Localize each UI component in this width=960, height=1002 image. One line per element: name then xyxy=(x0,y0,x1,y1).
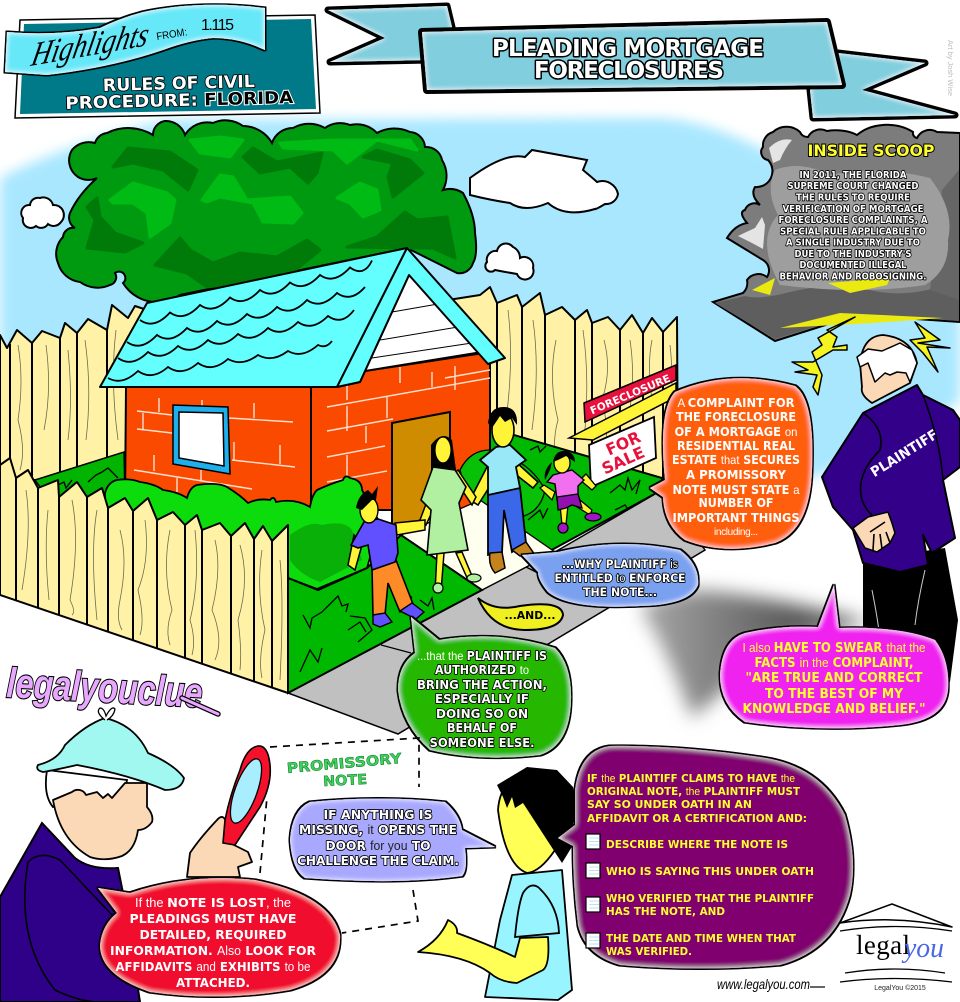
left grass behind fence xyxy=(35,452,125,515)
website url: www.legalyou.com xyxy=(717,976,810,992)
teal plate xyxy=(15,15,320,118)
boy xyxy=(348,486,425,627)
callout: purple original note bubble: WAS VERIFIED. xyxy=(606,945,692,958)
inside scoop body text: IN 2011, THE FLORIDA xyxy=(800,170,907,181)
callout: magenta swear bubble xyxy=(720,585,948,728)
callout: orange complaint bubble: A PROMISSORY xyxy=(686,468,786,482)
callout: red note lost bubble xyxy=(98,878,340,997)
callout: orange complaint bubble: NOTE MUST STATE a xyxy=(672,483,800,497)
ribbon xyxy=(5,5,265,75)
callout: orange complaint bubble: IMPORTANT THINGS xyxy=(672,511,800,525)
rules of civil procedure heading xyxy=(65,71,294,114)
sleeve xyxy=(515,885,559,937)
callout: orange complaint bubble: THE FORECLOSURE xyxy=(676,410,796,424)
callout: orange complaint bubble xyxy=(650,378,812,549)
callout: magenta swear bubble: I also HAVE TO SWEAR that the xyxy=(742,640,926,656)
callout: purple original note bubble: HAS THE NOTE, AND xyxy=(606,905,725,918)
callout: green authorized bubble: DOING SO ON xyxy=(436,707,528,721)
callout: lavender missing bubble: CHALLENGE THE CLAIM. xyxy=(297,853,459,868)
brick lines xyxy=(134,366,490,492)
callout: red note lost bubble: DETAILED, REQUIRED xyxy=(140,927,286,942)
callout: blue entitled bubble xyxy=(522,544,698,607)
plaintiff figure xyxy=(822,335,960,682)
highlights script: Highlights xyxy=(27,15,153,74)
right lawn xyxy=(460,428,662,552)
callout: green authorized bubble: SOMEONE ELSE. xyxy=(430,736,534,750)
girl xyxy=(540,451,601,533)
checklist icons xyxy=(586,834,600,948)
callout: green authorized bubble: AUTHORIZED to xyxy=(435,663,529,677)
face xyxy=(53,783,152,859)
callout: magenta swear bubble: FACTS in the COMPLAINT, xyxy=(754,655,914,671)
callout: lavender missing bubble: IF ANYTHING IS xyxy=(324,807,432,822)
rule number: 1.115 xyxy=(201,17,234,34)
for sale board: FOR xyxy=(603,427,644,459)
callout: orange complaint bubble: OF A MORTGAGE on xyxy=(674,425,798,439)
shirt xyxy=(485,870,572,1000)
arm xyxy=(418,920,548,983)
back fence right xyxy=(448,287,678,495)
callout: magenta swear bubble: "ARE TRUE AND CORRECT xyxy=(746,671,923,686)
large cloud centre xyxy=(470,150,618,212)
foreclosure banner: FORECLOSURE xyxy=(588,373,672,417)
callout: green authorized bubble: BEHALF OF xyxy=(447,721,517,735)
inside scoop body text: BEHAVIOR AND ROBOSIGNING. xyxy=(780,272,926,282)
callout: purple original note bubble: DESCRIBE WHERE THE NOTE IS xyxy=(606,838,788,851)
callout: orange complaint bubble: ESTATE that SECURES xyxy=(672,453,800,467)
plaintiff label: PLAINTIFF xyxy=(868,427,941,481)
storm cloud: inside scoop xyxy=(713,125,960,395)
title text: PLEADING MORTGAGE xyxy=(492,36,764,62)
yellow post xyxy=(569,383,676,440)
callout: blue entitled bubble: ...WHY PLAINTIFF is xyxy=(562,557,678,571)
lightning bolts xyxy=(792,317,950,395)
inside scoop body text: FORECLOSURE COMPLAINTS, A xyxy=(778,215,928,226)
walkway xyxy=(401,500,555,590)
callout: lavender missing bubble xyxy=(290,798,495,881)
father xyxy=(470,407,538,573)
side wall xyxy=(311,352,490,510)
callout: red note lost bubble: AFFIDAVITS and EXHIBITS to be xyxy=(116,959,311,974)
small cloud right xyxy=(485,243,534,280)
promissory note dashed outline xyxy=(260,738,419,933)
callout: blue entitled bubble: THE NOTE... xyxy=(583,585,657,599)
jacket seams xyxy=(860,395,943,515)
callout: magenta swear bubble: TO THE BEST OF MY xyxy=(765,687,904,702)
from label: FROM: xyxy=(156,26,188,43)
jacket xyxy=(0,823,140,1002)
rules of civil procedure heading: RULES OF CIVIL xyxy=(103,72,255,96)
cloud body xyxy=(713,125,960,341)
callout: purple original note bubble: ORIGINAL NOTE, the PLAINTIFF MUST xyxy=(587,785,800,798)
callout: orange complaint bubble: including... xyxy=(714,527,758,538)
roof xyxy=(100,248,505,387)
mother xyxy=(420,436,481,593)
title banner: FORECLOSURES xyxy=(534,58,724,84)
small cloud left xyxy=(21,197,64,228)
callout: purple original note bubble: IF the PLAINTIFF CLAIMS TO HAVE the xyxy=(587,772,795,785)
hair xyxy=(857,343,917,382)
hand xyxy=(187,817,252,877)
front bushes xyxy=(105,476,380,589)
inside scoop body text: DOCUMENTED ILLEGAL xyxy=(800,260,906,271)
callout: green authorized bubble: ...that the PLAINTIFF IS xyxy=(417,649,547,663)
promissory note label: PROMISSORY xyxy=(286,751,403,777)
detective figure xyxy=(0,708,270,1002)
right tail xyxy=(810,53,955,118)
tree canopy xyxy=(56,120,476,302)
inside scoop body text xyxy=(778,170,928,282)
legalyouclue logo: legalyouclue xyxy=(6,659,204,716)
boy figure right xyxy=(418,767,577,1000)
callout: lavender missing bubble: MISSING, it OPENS THE xyxy=(299,822,457,837)
front wall xyxy=(125,387,311,510)
inside scoop body text: DUE TO THE INDUSTRY'S xyxy=(794,249,912,260)
head xyxy=(860,335,917,403)
pants xyxy=(863,548,958,682)
callout: orange complaint bubble: RESIDENTIAL REAL xyxy=(677,439,795,453)
legalyou logo: you xyxy=(901,933,944,964)
hair xyxy=(497,767,577,863)
legalyou logo: legal xyxy=(856,930,910,960)
callout: purple original note bubble: AFFIDAVIT OR A CERTIFICATION AND: xyxy=(587,812,807,825)
inside scoop heading: INSIDE SCOOP xyxy=(808,141,935,160)
magnifying glass xyxy=(223,746,270,845)
callout: red note lost bubble: PLEADINGS MUST HAVE xyxy=(130,911,296,926)
for sale board: SALE xyxy=(599,443,648,478)
callout: orange complaint bubble: A COMPLAINT FOR xyxy=(678,396,794,410)
family xyxy=(348,407,601,627)
front fence xyxy=(0,458,288,693)
title banner xyxy=(328,6,955,118)
callout: purple original note bubble: WHO VERIFIED THAT THE PLAINTIFF xyxy=(606,892,814,905)
inside scoop body text: VERIFICATION OF MORTGAGE xyxy=(782,204,924,215)
inside scoop body text: SPECIAL RULE APPLICABLE TO xyxy=(780,226,926,238)
left lawn xyxy=(288,535,482,693)
inside scoop body text: A SINGLE INDUSTRY DUE TO xyxy=(786,238,920,248)
foreclosure sign xyxy=(569,365,676,487)
door xyxy=(392,412,450,530)
callout: red note lost bubble: INFORMATION. Also LOOK FOR xyxy=(110,943,316,958)
callout: blue entitled bubble: ENTITLED to ENFORCE xyxy=(554,571,686,585)
callout: yellow and bubble: ...AND... xyxy=(504,609,556,622)
sky background xyxy=(0,118,960,510)
back fence left xyxy=(0,305,147,480)
callout: green authorized bubble: ESPECIALLY IF xyxy=(435,692,529,706)
inside scoop body text: THE RULES TO REQUIRE xyxy=(796,192,910,204)
highlights panel xyxy=(5,5,320,118)
callout: magenta swear bubble: KNOWLEDGE AND BELIEF." xyxy=(742,702,926,717)
window xyxy=(173,405,230,474)
rules of civil procedure heading: PROCEDURE: FLORIDA xyxy=(65,88,294,114)
left tail xyxy=(328,6,452,62)
clasped hands xyxy=(853,512,895,552)
hair xyxy=(46,770,127,807)
callout: green authorized bubble: BRING THE ACTION, xyxy=(417,678,547,692)
legalyou logo xyxy=(840,904,952,992)
house xyxy=(100,248,505,530)
callout: purple original note bubble xyxy=(558,746,853,968)
sidewalk xyxy=(288,490,705,734)
artist credit: Art by Josh Wise xyxy=(946,40,955,96)
deerstalker hat xyxy=(37,708,184,790)
gable xyxy=(365,275,482,371)
callout: red note lost bubble: ATTACHED. xyxy=(176,975,250,990)
for sale board xyxy=(589,417,656,487)
callout: yellow and bubble xyxy=(478,598,563,630)
callout: purple original note bubble: THE DATE AND TIME WHEN THAT xyxy=(606,932,796,945)
callout: green authorized bubble xyxy=(398,617,571,758)
banner body xyxy=(422,22,842,90)
face xyxy=(498,775,555,873)
callout: lavender missing bubble: DOOR for you TO xyxy=(326,838,430,853)
legalyou logo: LegalYou ©2015 xyxy=(874,984,926,992)
inside scoop body text: SUPREME COURT CHANGED xyxy=(788,181,919,192)
callout: purple original note bubble: SAY SO UNDER OATH IN AN xyxy=(587,798,752,811)
promissory note dashed outline: NOTE xyxy=(323,772,367,790)
jacket xyxy=(822,385,960,572)
callout: red note lost bubble: If the NOTE IS LOST, the xyxy=(135,895,291,910)
callout: orange complaint bubble: NUMBER OF xyxy=(698,496,774,510)
shadow xyxy=(640,590,870,718)
callout: purple original note bubble: WHO IS SAYING THIS UNDER OATH xyxy=(606,865,814,878)
